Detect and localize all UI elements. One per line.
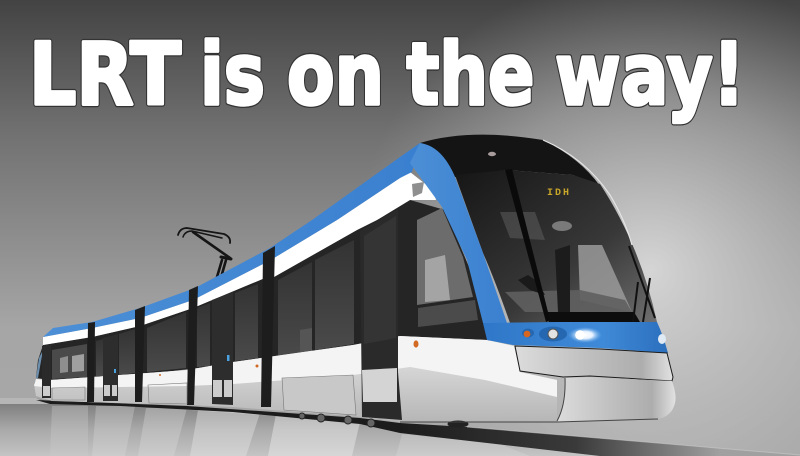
mirror icon [412,182,424,197]
title fill: is [200,25,265,125]
tram [34,135,676,427]
title fill: LRT [29,25,181,125]
title outline: way! [555,25,745,125]
windshield interior reflections [500,169,640,322]
black door and joints [42,209,402,420]
title fill: on [287,25,384,125]
pantograph [178,228,231,277]
title [29,25,745,125]
front lower nose [515,346,673,381]
side windows [52,208,478,379]
title fill: way! [555,25,745,125]
rail shadow [36,400,800,456]
title outline: the [406,25,534,125]
wheels [299,413,468,427]
destination display: IDH [547,188,571,199]
tram underside line [400,419,658,422]
title outline [29,25,745,125]
cab light edge [543,140,632,245]
door buttons [114,355,230,373]
wipers [629,246,655,322]
lower white body [34,336,557,397]
white roof band [43,172,436,345]
window interior patches [60,255,450,373]
underframe panels [52,375,356,415]
tram side dark body [36,200,490,380]
title outline: on [287,25,384,125]
title fill [29,25,745,125]
orange side markers [159,340,418,376]
headlamps [522,326,666,344]
blue arch [410,143,507,323]
title fill: the [406,25,534,125]
title outline: is [200,25,265,125]
roof sensor [488,152,496,156]
blue roof stripe [43,143,420,337]
floor and reflection [0,398,800,456]
windshield [455,170,657,323]
cab roof [420,135,600,186]
front-end side glass [36,350,43,378]
lower grey body [34,336,557,422]
blue front bumper [483,322,668,353]
title outline: LRT [29,25,181,125]
